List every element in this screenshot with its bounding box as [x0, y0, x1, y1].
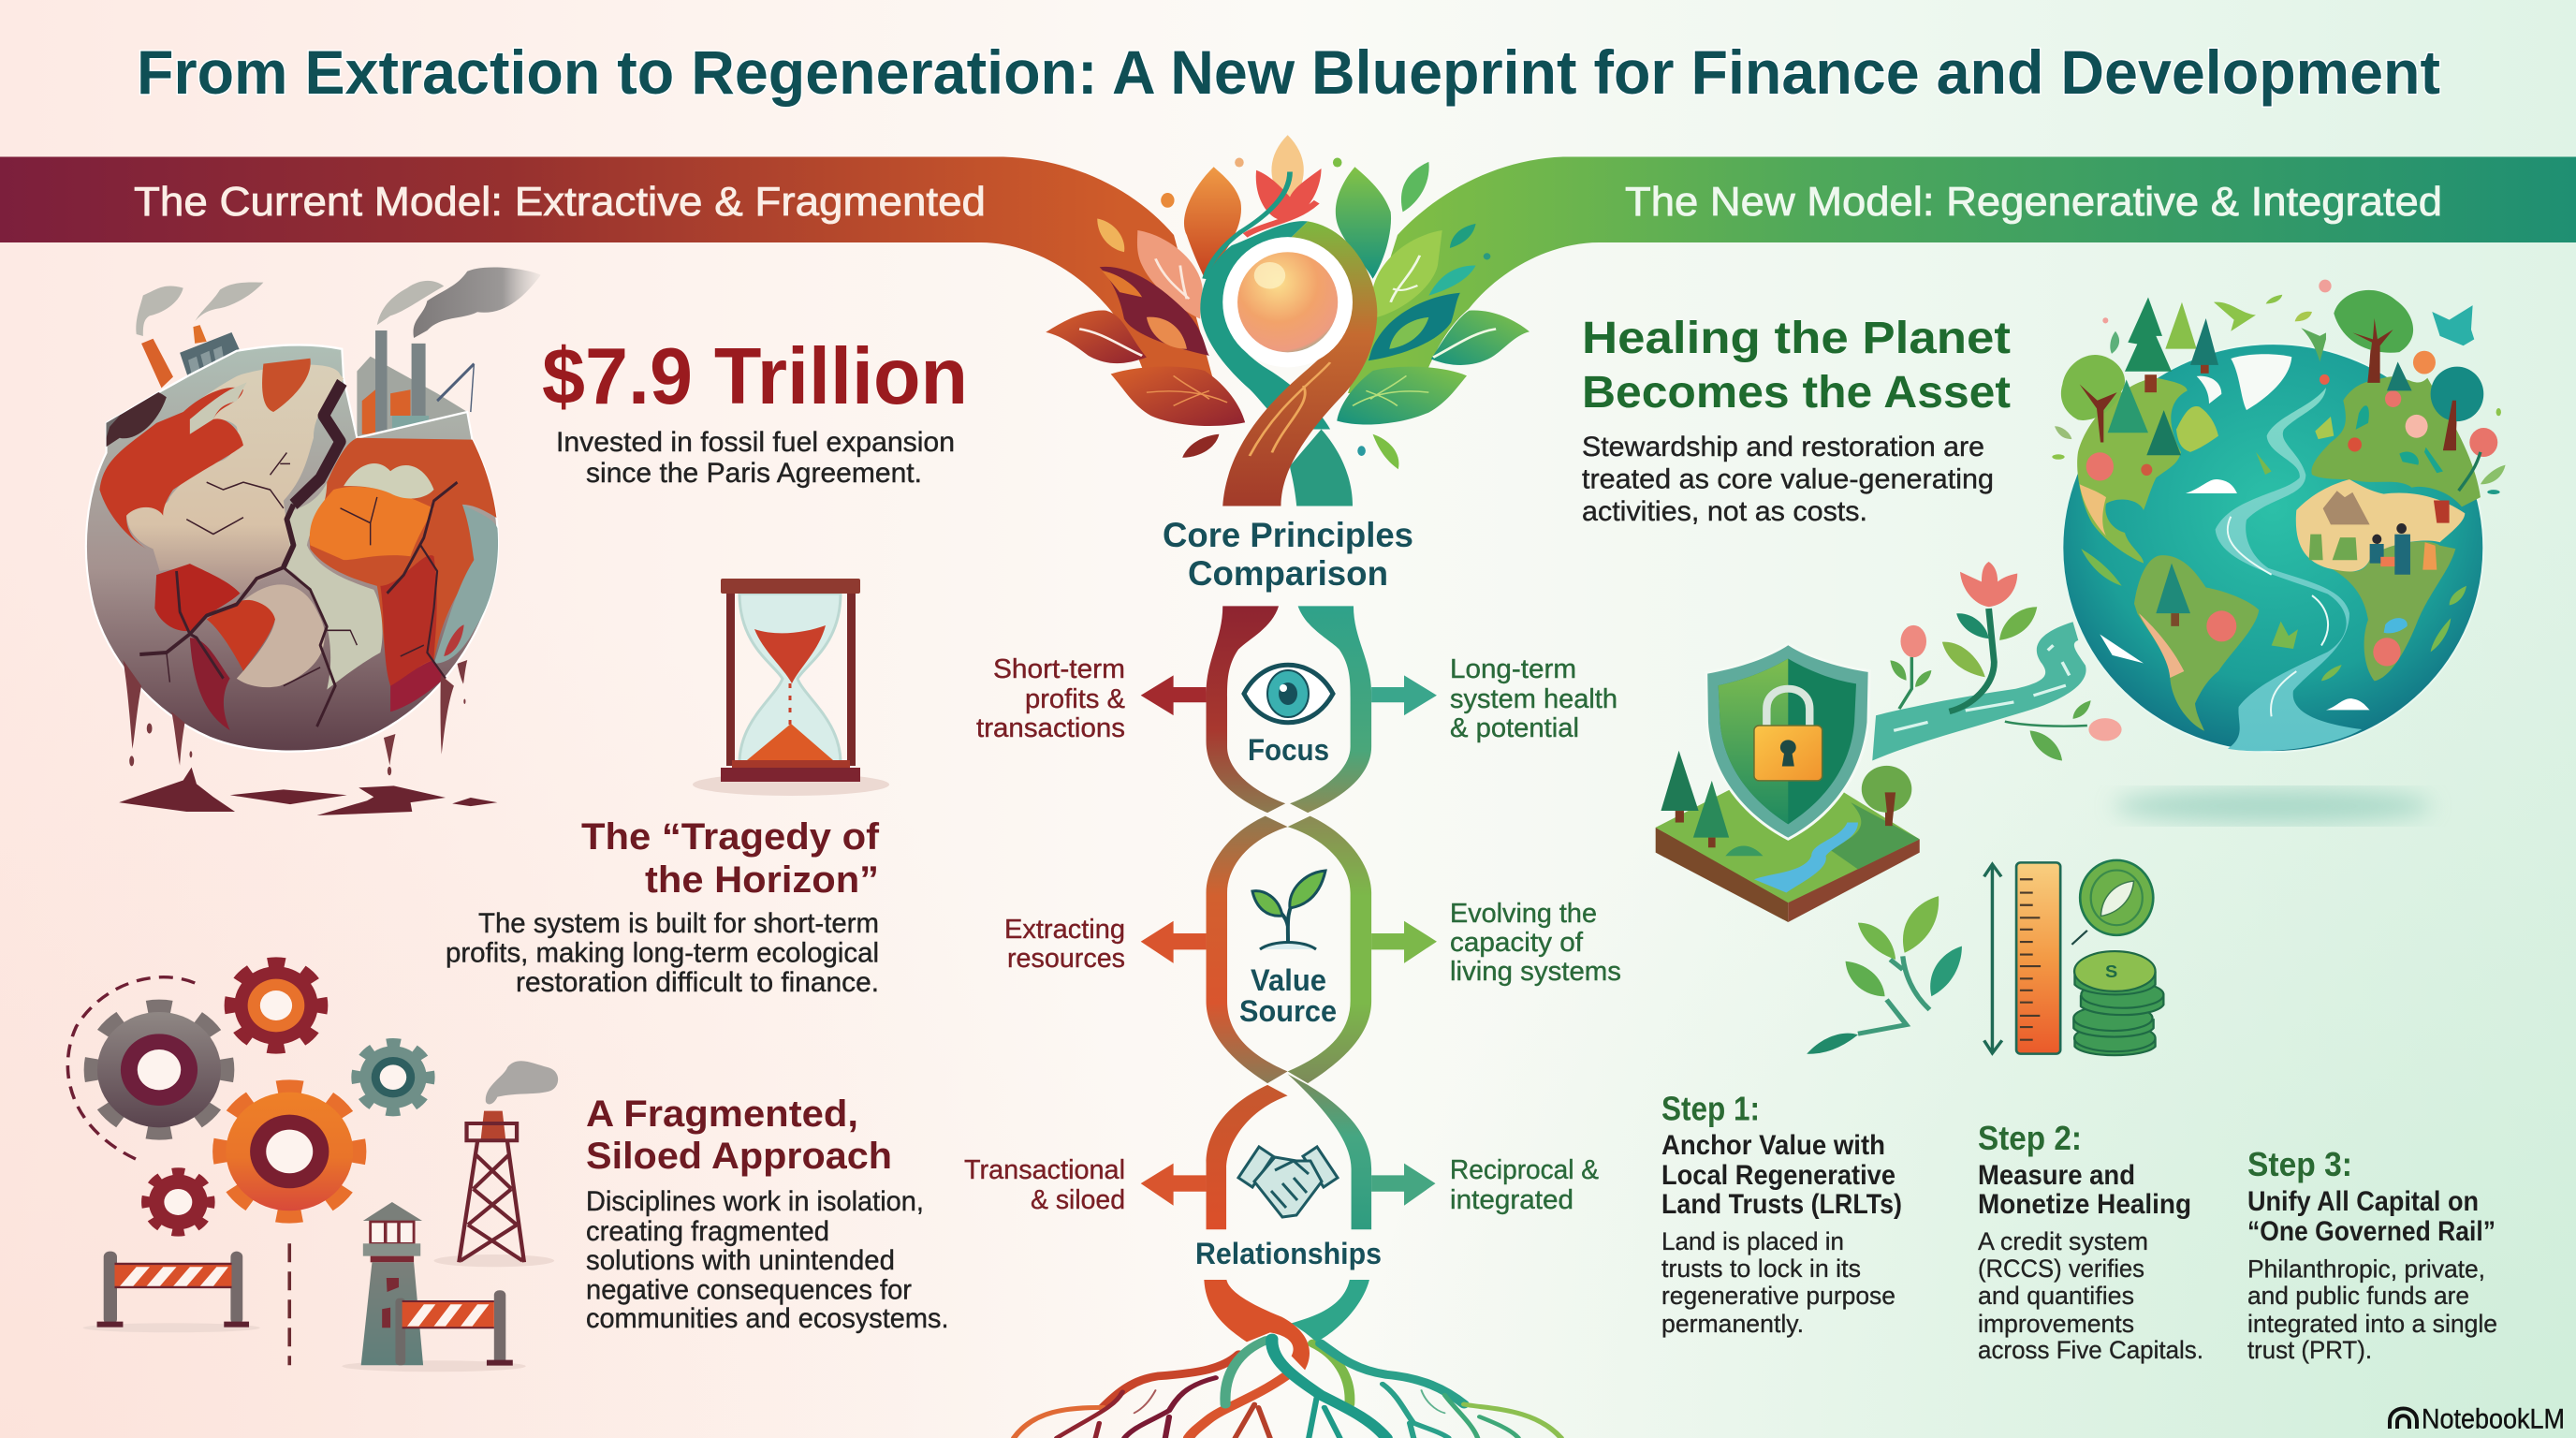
step 2: Step 2: — [1978, 1119, 2082, 1157]
stat: 7.9 trillion — [542, 332, 968, 489]
text: tragedy of the horizon: restoration difficult to finance. — [516, 967, 879, 998]
banner: new model — [1348, 157, 2576, 393]
step 2 — [1978, 1119, 2203, 1364]
step 3: Philanthropic, private, — [2247, 1255, 2485, 1283]
labels: new model column: integrated — [1450, 1185, 1573, 1215]
label: value source — [1239, 963, 1337, 1028]
labels: new model column: capacity of — [1450, 928, 1584, 958]
icon: shield and land trust — [1656, 562, 2122, 922]
panel: left current model — [67, 267, 968, 1372]
step 2: (RCCS) verifies — [1978, 1255, 2144, 1283]
step 2: improvements — [1978, 1310, 2134, 1338]
text: healing the planet: Healing the Planet — [1582, 314, 2011, 363]
icon: roots — [1014, 1280, 1561, 1438]
labels: new model column: & potential — [1450, 713, 1579, 743]
arrow: left focus — [1141, 675, 1207, 715]
step 1: Local Regenerative — [1661, 1160, 1895, 1191]
text: fragmented siloed approach: communities and ecosystems. — [586, 1303, 949, 1334]
labels: current model column: & siloed — [1031, 1185, 1125, 1215]
icon: central tree with orb — [1046, 135, 1530, 506]
text: fragmented siloed approach: Siloed Approach — [586, 1136, 892, 1177]
arrow: right relationships — [1371, 1164, 1436, 1206]
labels: new model column: Evolving the — [1450, 899, 1597, 929]
icon: cracked polluted earth — [86, 267, 541, 815]
step 3 — [2247, 1145, 2497, 1364]
heading: core principles comparison — [1163, 516, 1413, 593]
icon: healthy earth — [2052, 280, 2506, 752]
banner: current model — [0, 157, 1217, 393]
step 2: A credit system — [1978, 1227, 2148, 1255]
step 1: Anchor Value with — [1661, 1130, 1885, 1161]
icon: ground shadow under earth — [2114, 789, 2432, 823]
labels: current model column: transactions — [976, 713, 1125, 743]
step 1: Step 1: — [1661, 1090, 1760, 1127]
text: healing the planet: Becomes the Asset — [1582, 368, 2011, 418]
labels: current model column: Extracting — [1004, 915, 1125, 945]
labels: current model column — [964, 654, 1125, 1215]
icon: handshake — [1238, 1147, 1338, 1217]
label: focus: Focus — [1248, 733, 1329, 767]
step 3: and public funds are — [2247, 1282, 2469, 1310]
text: tragedy of the horizon: the Horizon” — [645, 859, 879, 901]
labels: new model column — [1450, 654, 1621, 1215]
step 1: trusts to lock in its — [1661, 1255, 1861, 1283]
icon: gears and barriers — [67, 963, 558, 1372]
text: healing the planet — [1582, 314, 2011, 527]
label: value source: Value — [1251, 963, 1326, 997]
stat: 7.9 trillion: Invested in fossil fuel expansion — [556, 427, 955, 458]
text: healing the planet: activities, not as costs. — [1582, 496, 1867, 527]
arrow: left value — [1141, 921, 1207, 963]
step 1: Land is placed in — [1661, 1227, 1844, 1255]
icon: measurement and coins: S — [2105, 962, 2117, 982]
icon: eye — [1244, 665, 1333, 723]
step 1: regenerative purpose — [1661, 1282, 1895, 1310]
chart: intertwined strands — [1207, 606, 1371, 1229]
labels: current model column: resources — [1007, 944, 1125, 974]
text: tragedy of the horizon: The system is built for short-term — [478, 908, 879, 939]
arrow: right value — [1371, 921, 1437, 963]
labels: new model column: living systems — [1450, 957, 1621, 987]
panel: right new model — [1582, 280, 2506, 1364]
text: healing the planet: Stewardship and restoration are — [1582, 432, 1984, 462]
step 3: integrated into a single — [2247, 1310, 2497, 1338]
icon: hourglass — [693, 579, 889, 796]
labels: new model column: system health — [1450, 684, 1617, 714]
step 2: Monetize Healing — [1978, 1189, 2191, 1220]
text: fragmented siloed approach: negative consequences for — [586, 1275, 912, 1305]
icon: sprout — [1252, 871, 1325, 949]
text: fragmented siloed approach: creating fragmented — [586, 1216, 829, 1247]
heading: core principles comparison: Core Principles — [1163, 516, 1413, 554]
label: relationships: Relationships — [1195, 1237, 1382, 1270]
text: tragedy of the horizon: profits, making long-term ecological — [446, 938, 879, 968]
icon: measurement and coins — [1807, 860, 2163, 1055]
step 3: Step 3: — [2247, 1145, 2352, 1183]
text: healing the planet: treated as core value-generating — [1582, 464, 1994, 494]
text: fragmented siloed approach: A Fragmented, — [586, 1093, 858, 1135]
step 2: Measure and — [1978, 1160, 2135, 1191]
text: fragmented siloed approach — [586, 1093, 949, 1334]
arrow: right focus — [1371, 675, 1437, 715]
text: fragmented siloed approach: Disciplines work in isolation, — [586, 1186, 924, 1217]
heading: core principles comparison: Comparison — [1188, 554, 1388, 593]
stat: 7.9 trillion: since the Paris Agreement. — [586, 458, 922, 489]
step 1: permanently. — [1661, 1310, 1804, 1338]
labels: current model column: Short-term — [993, 654, 1125, 684]
step 3: Unify All Capital on — [2247, 1186, 2479, 1217]
labels: current model column: profits & — [1025, 684, 1125, 714]
stat: 7.9 trillion: $7.9 Trillion — [542, 332, 968, 421]
step 1: Land Trusts (LRLTs) — [1661, 1189, 1902, 1220]
banner: current model: The Current Model: Extractive & Fragmented — [134, 179, 986, 225]
labels: new model column: Long-term — [1450, 654, 1576, 684]
label: value source: Source — [1239, 994, 1337, 1028]
text: tragedy of the horizon: The “Tragedy of — [581, 816, 880, 858]
step 3: “One Governed Rail” — [2247, 1216, 2496, 1247]
banner: new model: The New Model: Regenerative & Integrated — [1625, 179, 2442, 225]
labels: current model column: Transactional — [964, 1155, 1125, 1185]
text: fragmented siloed approach: solutions with unintended — [586, 1245, 895, 1276]
text: tragedy of the horizon — [446, 816, 880, 998]
title: From Extraction to Regeneration: A New Blueprint for Finance and Development — [137, 37, 2440, 107]
step 1 — [1661, 1090, 1902, 1338]
step 2: and quantifies — [1978, 1282, 2134, 1310]
labels: new model column: Reciprocal & — [1450, 1155, 1599, 1185]
arrow: left relationships — [1141, 1164, 1207, 1206]
step 2: across Five Capitals. — [1978, 1336, 2203, 1364]
step 3: trust (PRT). — [2247, 1336, 2372, 1364]
